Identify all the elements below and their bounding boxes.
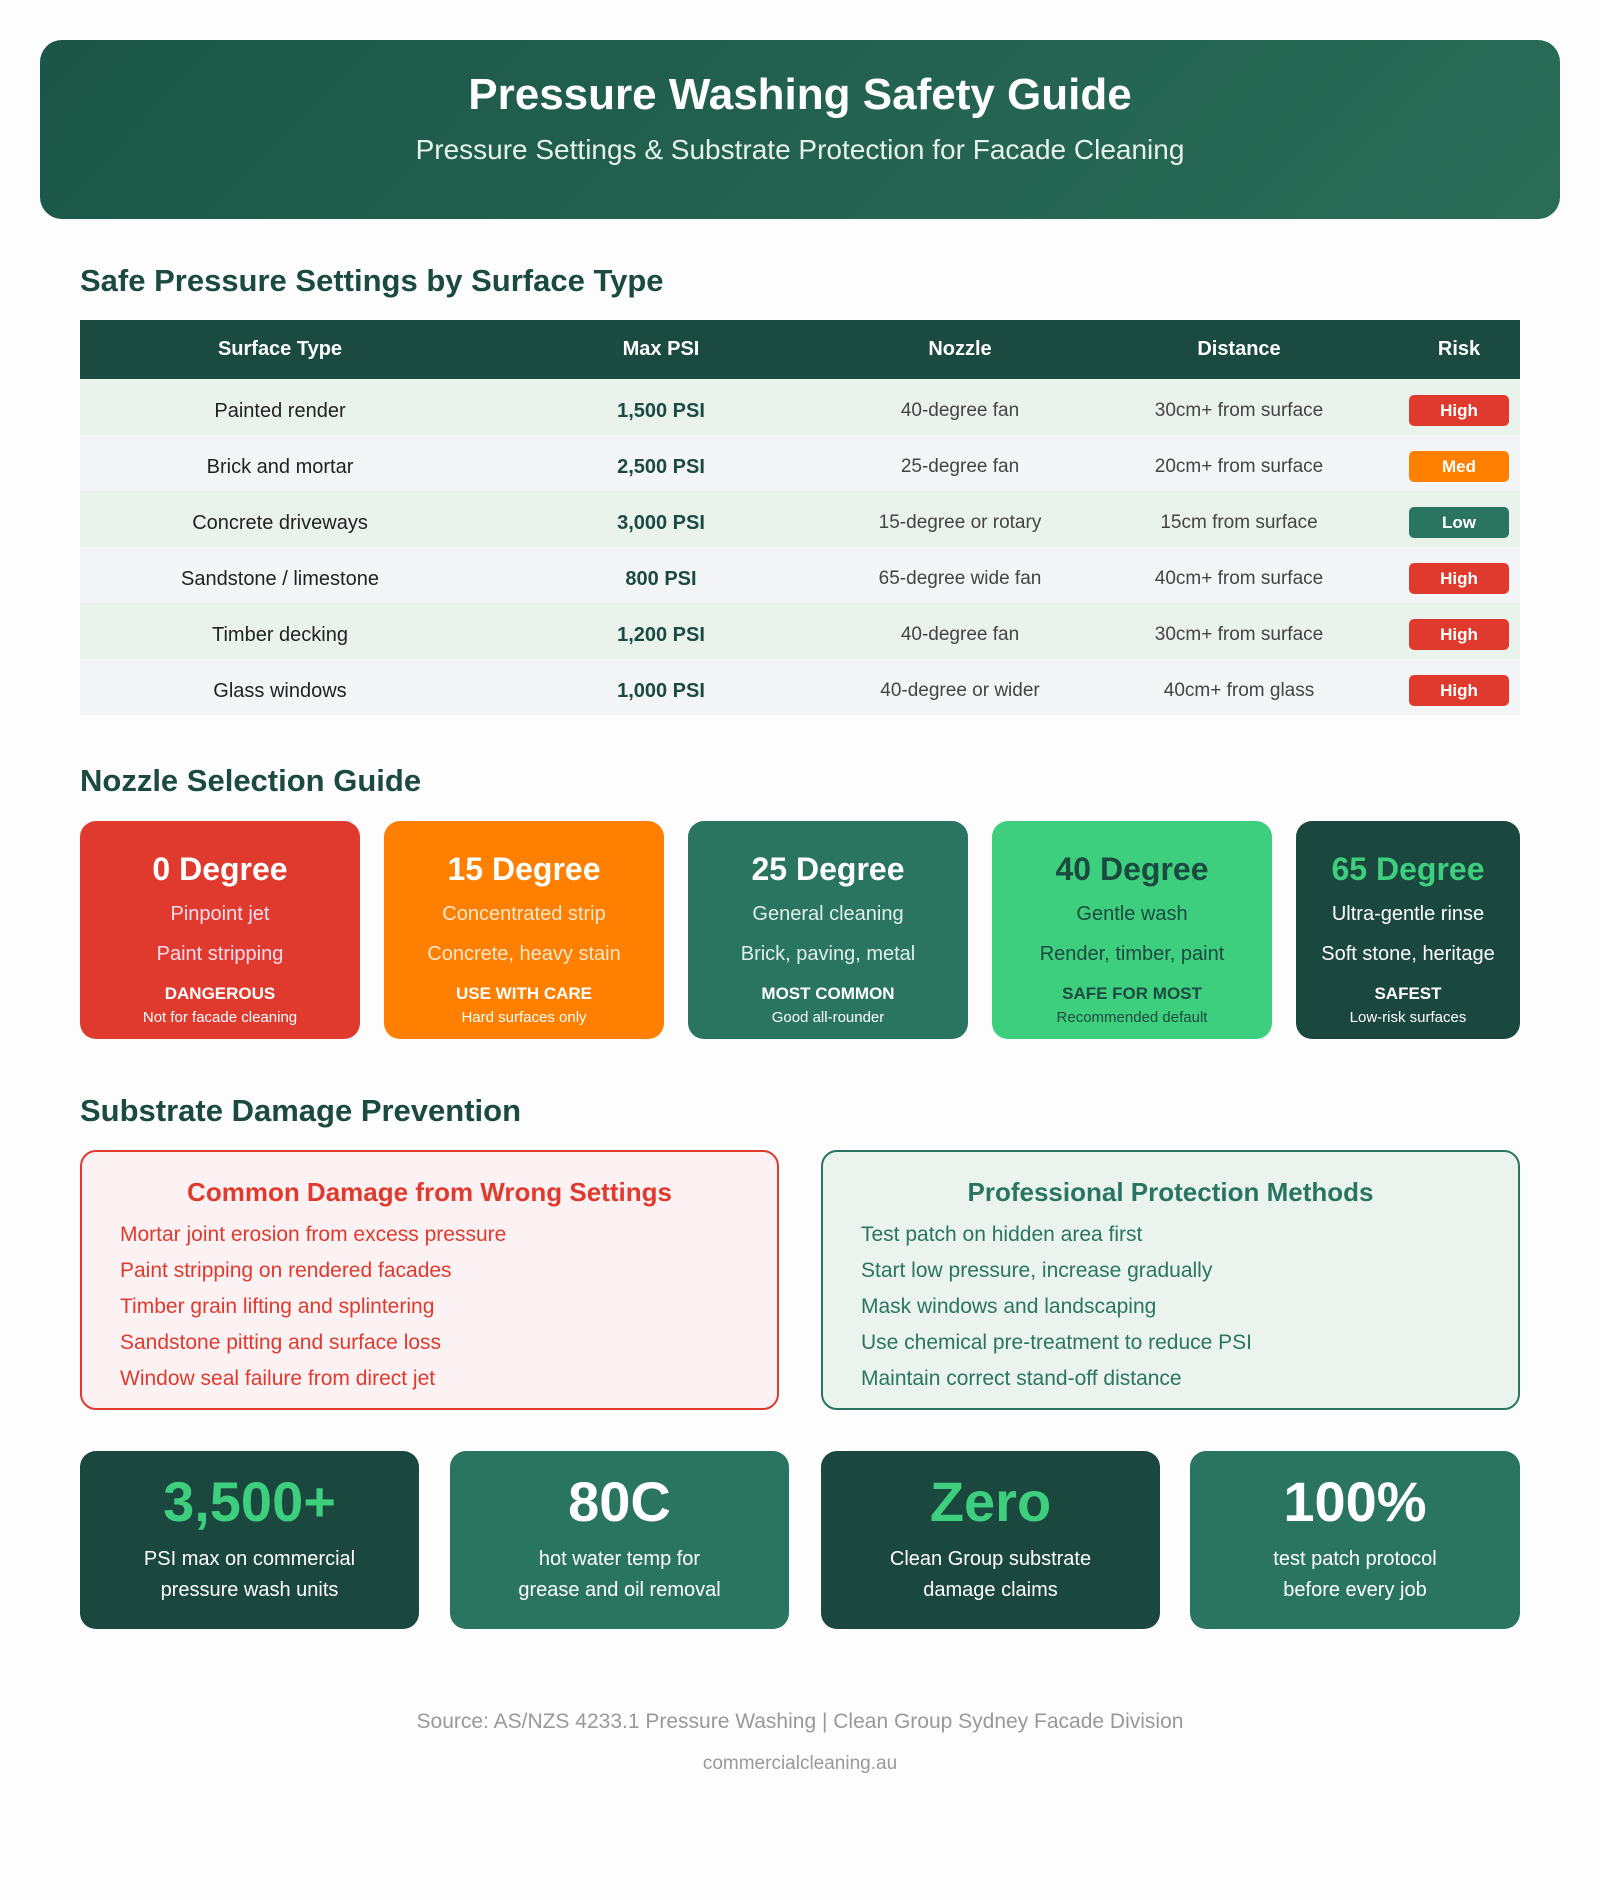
footer source: Source: AS/NZS 4233.1 Pressure Washing | Clean Group Sydney Facade Division [417,1710,1183,1733]
card: 15 degree [384,821,664,1039]
stat: 3500: PSI max on commercial [144,1548,355,1570]
card: 65 degree [1296,821,1520,1039]
table header: Surface Type [218,338,342,360]
card: 15 degree: Hard surfaces only [461,1009,587,1026]
row: concrete: 15cm from surface [1160,512,1318,533]
card: 40 degree: Recommended default [1057,1009,1207,1026]
row: timber: 30cm+ from surface [1155,624,1323,645]
card: 25 degree [688,821,968,1039]
row: sandstone [80,547,1520,603]
table header [80,320,1520,379]
panel: common damage: Common Damage from Wrong Settings [187,1177,672,1207]
row: glass: 1,000 PSI [617,680,705,702]
row: painted render: 40-degree fan [901,400,1019,421]
row: timber: 1,200 PSI [617,624,705,646]
card: 0 degree: Paint stripping [157,943,283,965]
stat: 3500: pressure wash units [161,1579,338,1601]
stat: zero: Clean Group substrate [890,1548,1091,1570]
card: 40 degree: Gentle wash [1076,903,1188,925]
row: timber: Timber decking [212,624,348,646]
card: 25 degree: Good all-rounder [772,1009,884,1026]
heading: substrate damage: Substrate Damage Prevention [80,1093,521,1128]
stat: zero [821,1451,1160,1629]
row: concrete: Low [1442,513,1476,532]
row: painted render: 30cm+ from surface [1155,400,1323,421]
card: 15 degree: Concrete, heavy stain [427,943,621,965]
row: painted render [80,379,1520,435]
panel: common damage: Window seal failure from direct jet [120,1367,435,1390]
stat: 100%: before every job [1283,1579,1427,1601]
card: 65 degree: Ultra-gentle rinse [1332,903,1484,925]
header banner [40,40,1560,219]
card: 0 degree [80,821,360,1039]
row: timber: 40-degree fan [901,624,1019,645]
row: brick: Med [1442,457,1476,476]
stat: zero: damage claims [923,1579,1058,1601]
heading: safe pressure settings: Safe Pressure Settings by Surface Type [80,263,664,298]
footer url: commercialcleaning.au [703,1753,897,1774]
stat: 80C [450,1451,789,1629]
card: 0 degree: Not for facade cleaning [143,1009,297,1026]
panel: protection methods: Maintain correct stand-off distance [861,1367,1182,1390]
card: 40 degree: Render, timber, paint [1040,943,1224,965]
row: painted render: 1,500 PSI [617,400,705,422]
stat: 3500: 3,500+ [163,1470,336,1533]
card: 65 degree: Soft stone, heritage [1321,943,1495,965]
table header: Risk [1438,338,1480,360]
card: 40 degree: SAFE FOR MOST [1062,984,1202,1003]
panel: common damage: Sandstone pitting and surface loss [120,1331,441,1354]
card: 65 degree: SAFEST [1374,984,1442,1003]
panel: common damage: Mortar joint erosion from excess pressure [120,1223,506,1246]
row: brick: 2,500 PSI [617,456,705,478]
table header: Max PSI [623,338,699,360]
card: 65 degree: Low-risk surfaces [1350,1009,1466,1026]
row: glass [80,659,1520,715]
panel: common damage: Timber grain lifting and splintering [120,1295,434,1318]
table header: Distance [1197,338,1281,360]
panel: common damage: Paint stripping on rendered facades [120,1259,452,1282]
row: sandstone: 40cm+ from surface [1155,568,1323,589]
card: 25 degree: MOST COMMON [761,984,895,1003]
row: timber: High [1440,625,1478,644]
row: sandstone: Sandstone / limestone [181,568,379,590]
card: 65 degree: 65 Degree [1332,851,1484,887]
panel: protection methods: Start low pressure, increase gradually [861,1259,1212,1282]
row: glass: Glass windows [213,680,347,702]
row: glass: 40-degree or wider [880,680,1040,701]
panel: protection methods [821,1150,1520,1410]
row: concrete: Concrete driveways [192,512,368,534]
stat: 80C: hot water temp for [539,1548,700,1570]
heading: nozzle selection: Nozzle Selection Guide [80,763,421,798]
row: brick: 20cm+ from surface [1155,456,1323,477]
panel: protection methods: Test patch on hidden area first [861,1223,1142,1246]
stat: zero: Zero [930,1470,1051,1533]
table [80,320,1520,715]
subtitle: Pressure Settings & Substrate Protection for Facade Cleaning [416,134,1184,165]
stat: 3500 [80,1451,419,1629]
row: concrete [80,491,1520,547]
stat: 100% [1190,1451,1520,1629]
card: 40 degree: 40 Degree [1056,851,1208,887]
stat: 80C: grease and oil removal [518,1579,721,1601]
panel: common damage [80,1150,779,1410]
card: 0 degree: 0 Degree [152,851,288,887]
row: sandstone: 65-degree wide fan [879,568,1041,589]
card: 25 degree: 25 Degree [752,851,904,887]
row: painted render: High [1440,401,1478,420]
panel: protection methods: Use chemical pre-treatment to reduce PSI [861,1331,1252,1354]
panel: protection methods: Professional Protection Methods [968,1177,1373,1207]
panel: protection methods: Mask windows and landscaping [861,1295,1156,1318]
row: glass: 40cm+ from glass [1164,680,1314,701]
stat: 100%: test patch protocol [1273,1548,1437,1570]
row: glass: High [1440,681,1478,700]
row: painted render: Painted render [214,400,346,422]
stat: 100%: 100% [1283,1470,1427,1533]
card: 40 degree [992,821,1272,1039]
row: concrete: 15-degree or rotary [879,512,1041,533]
row: brick: 25-degree fan [901,456,1019,477]
card: 0 degree: Pinpoint jet [171,903,269,925]
card: 25 degree: Brick, paving, metal [741,943,915,965]
card: 25 degree: General cleaning [752,903,904,925]
card: 15 degree: 15 Degree [448,851,600,887]
row: sandstone: High [1440,569,1478,588]
title: Pressure Washing Safety Guide [468,70,1132,119]
card: 15 degree: USE WITH CARE [456,984,592,1003]
row: timber [80,603,1520,659]
stat: 80C: 80C [568,1470,671,1533]
card: 15 degree: Concentrated strip [442,903,606,925]
row: brick: Brick and mortar [207,456,353,478]
table header: Nozzle [928,338,992,360]
row: sandstone: 800 PSI [625,568,697,590]
card: 0 degree: DANGEROUS [165,984,275,1003]
row: concrete: 3,000 PSI [617,512,705,534]
row: brick [80,435,1520,491]
